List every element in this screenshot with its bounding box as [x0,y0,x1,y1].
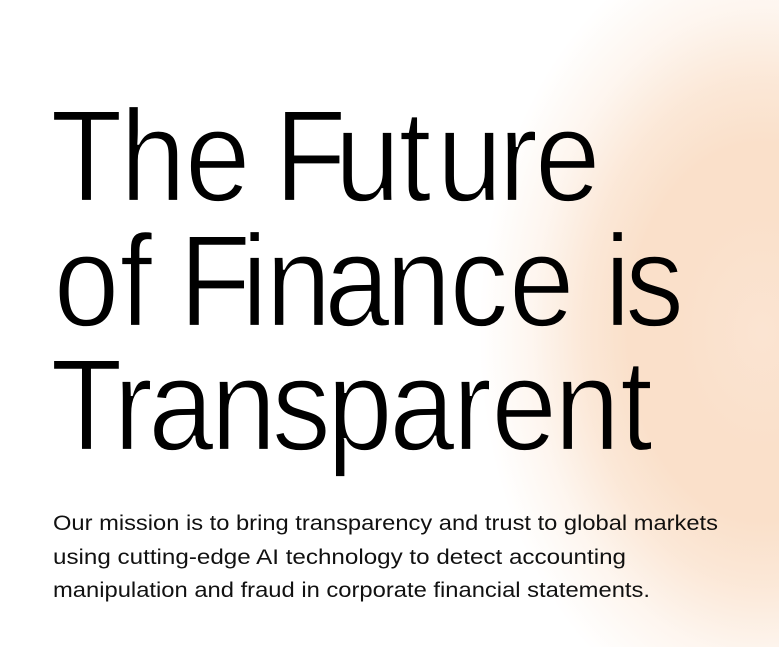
mission statement: manipulation and fraud in corporate financial statements. [53,579,650,602]
title: The Future [50,83,601,229]
title: of Finance is [54,208,684,354]
mission statement [53,512,718,602]
mission statement: Our mission is to bring transparency and trust to global markets [53,512,718,535]
title: Transparent [50,332,653,478]
mission statement: using cutting-edge AI technology to detect accounting [53,546,626,569]
title [50,83,684,478]
